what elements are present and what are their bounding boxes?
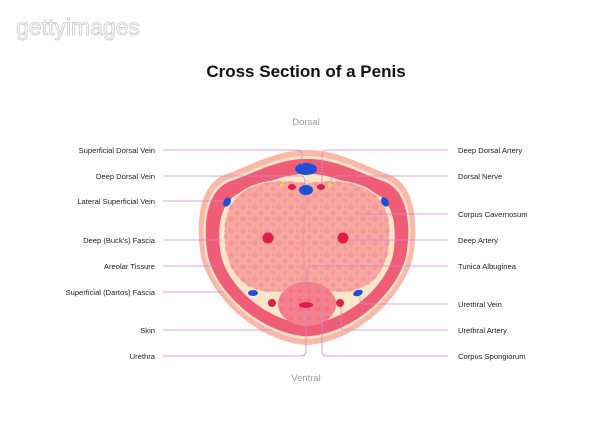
dartos fascia line (204, 156, 410, 339)
deep fascia band (206, 159, 408, 336)
watermark: gettyimages (16, 14, 140, 40)
right labels: Deep Dorsal Artery (458, 146, 522, 155)
superficial dorsal vein (295, 163, 317, 175)
label: dorsal: Dorsal (292, 117, 320, 128)
left labels: Superficial Dorsal Vein (79, 146, 155, 155)
left labels (66, 146, 156, 361)
corpus spongiosum (278, 282, 336, 326)
left labels: Urethra (130, 352, 156, 361)
left labels: Superficial (Dartos) Fascia (66, 288, 156, 297)
title: Cross Section of a Penis (206, 62, 406, 81)
leader lines (163, 150, 448, 356)
left labels: Lateral Superficial Vein (77, 197, 155, 206)
right labels: Deep Artery (458, 236, 498, 245)
deep dorsal vein (299, 185, 313, 195)
corpus cavernosum (224, 181, 390, 292)
left labels: Areolar Tissure (104, 262, 155, 271)
areolar tissue (219, 174, 395, 324)
right labels: Dorsal Nerve (458, 172, 502, 181)
left labels: Deep (Buck's) Fascia (83, 236, 156, 245)
lateral superficial veins (221, 196, 233, 208)
right labels: Corpus Cavernosum (458, 210, 528, 219)
right labels: Corpus Spongiorum (458, 352, 526, 361)
diagram: cross section (199, 150, 415, 345)
dorsal nerves (280, 183, 284, 187)
left labels: Skin (140, 326, 155, 335)
left labels: Deep Dorsal Vein (96, 172, 155, 181)
skin (199, 150, 415, 345)
label: ventral: Ventral (291, 373, 321, 384)
deep arteries (262, 232, 274, 244)
urethra (299, 302, 313, 308)
dorsal arteries (288, 184, 296, 190)
right labels: Tunica Albuginea (458, 262, 517, 271)
urethral arteries (268, 299, 276, 307)
urethral veins (248, 290, 258, 296)
right labels (458, 146, 528, 361)
right labels: Urethral Artery (458, 326, 507, 335)
right labels: Urethral Vein (458, 300, 502, 309)
